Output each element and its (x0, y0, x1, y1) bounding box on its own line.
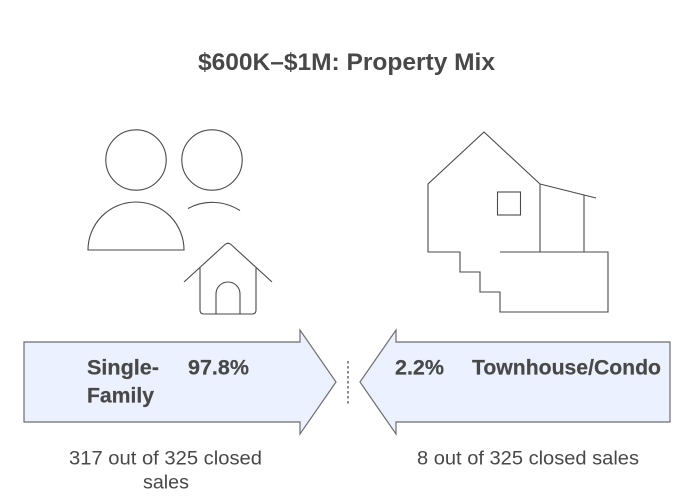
title: $600K–$1M: Property Mix (198, 49, 496, 76)
label: townhouse/condo: Townhouse/Condo (472, 356, 661, 380)
label: single-family: Single- (87, 356, 159, 380)
value: 2.2%: 2.2% (395, 356, 444, 380)
label: family: Family (87, 384, 154, 408)
text: single-family count (69, 448, 262, 494)
panel: townhouse/condo arrow (360, 330, 670, 434)
value: 97.8%: 97.8% (188, 356, 249, 380)
divider: dotted centre line (347, 361, 349, 406)
icon: two people and a house (88, 130, 272, 314)
text: townhouse/condo count: 8 out of 325 closed sales (417, 448, 639, 470)
text: single-family count: 317 out of 325 closed (69, 448, 262, 470)
icon: townhouse with stairs (428, 132, 608, 312)
text: single-family count: sales (143, 472, 189, 494)
panel: single-family arrow (24, 330, 336, 434)
